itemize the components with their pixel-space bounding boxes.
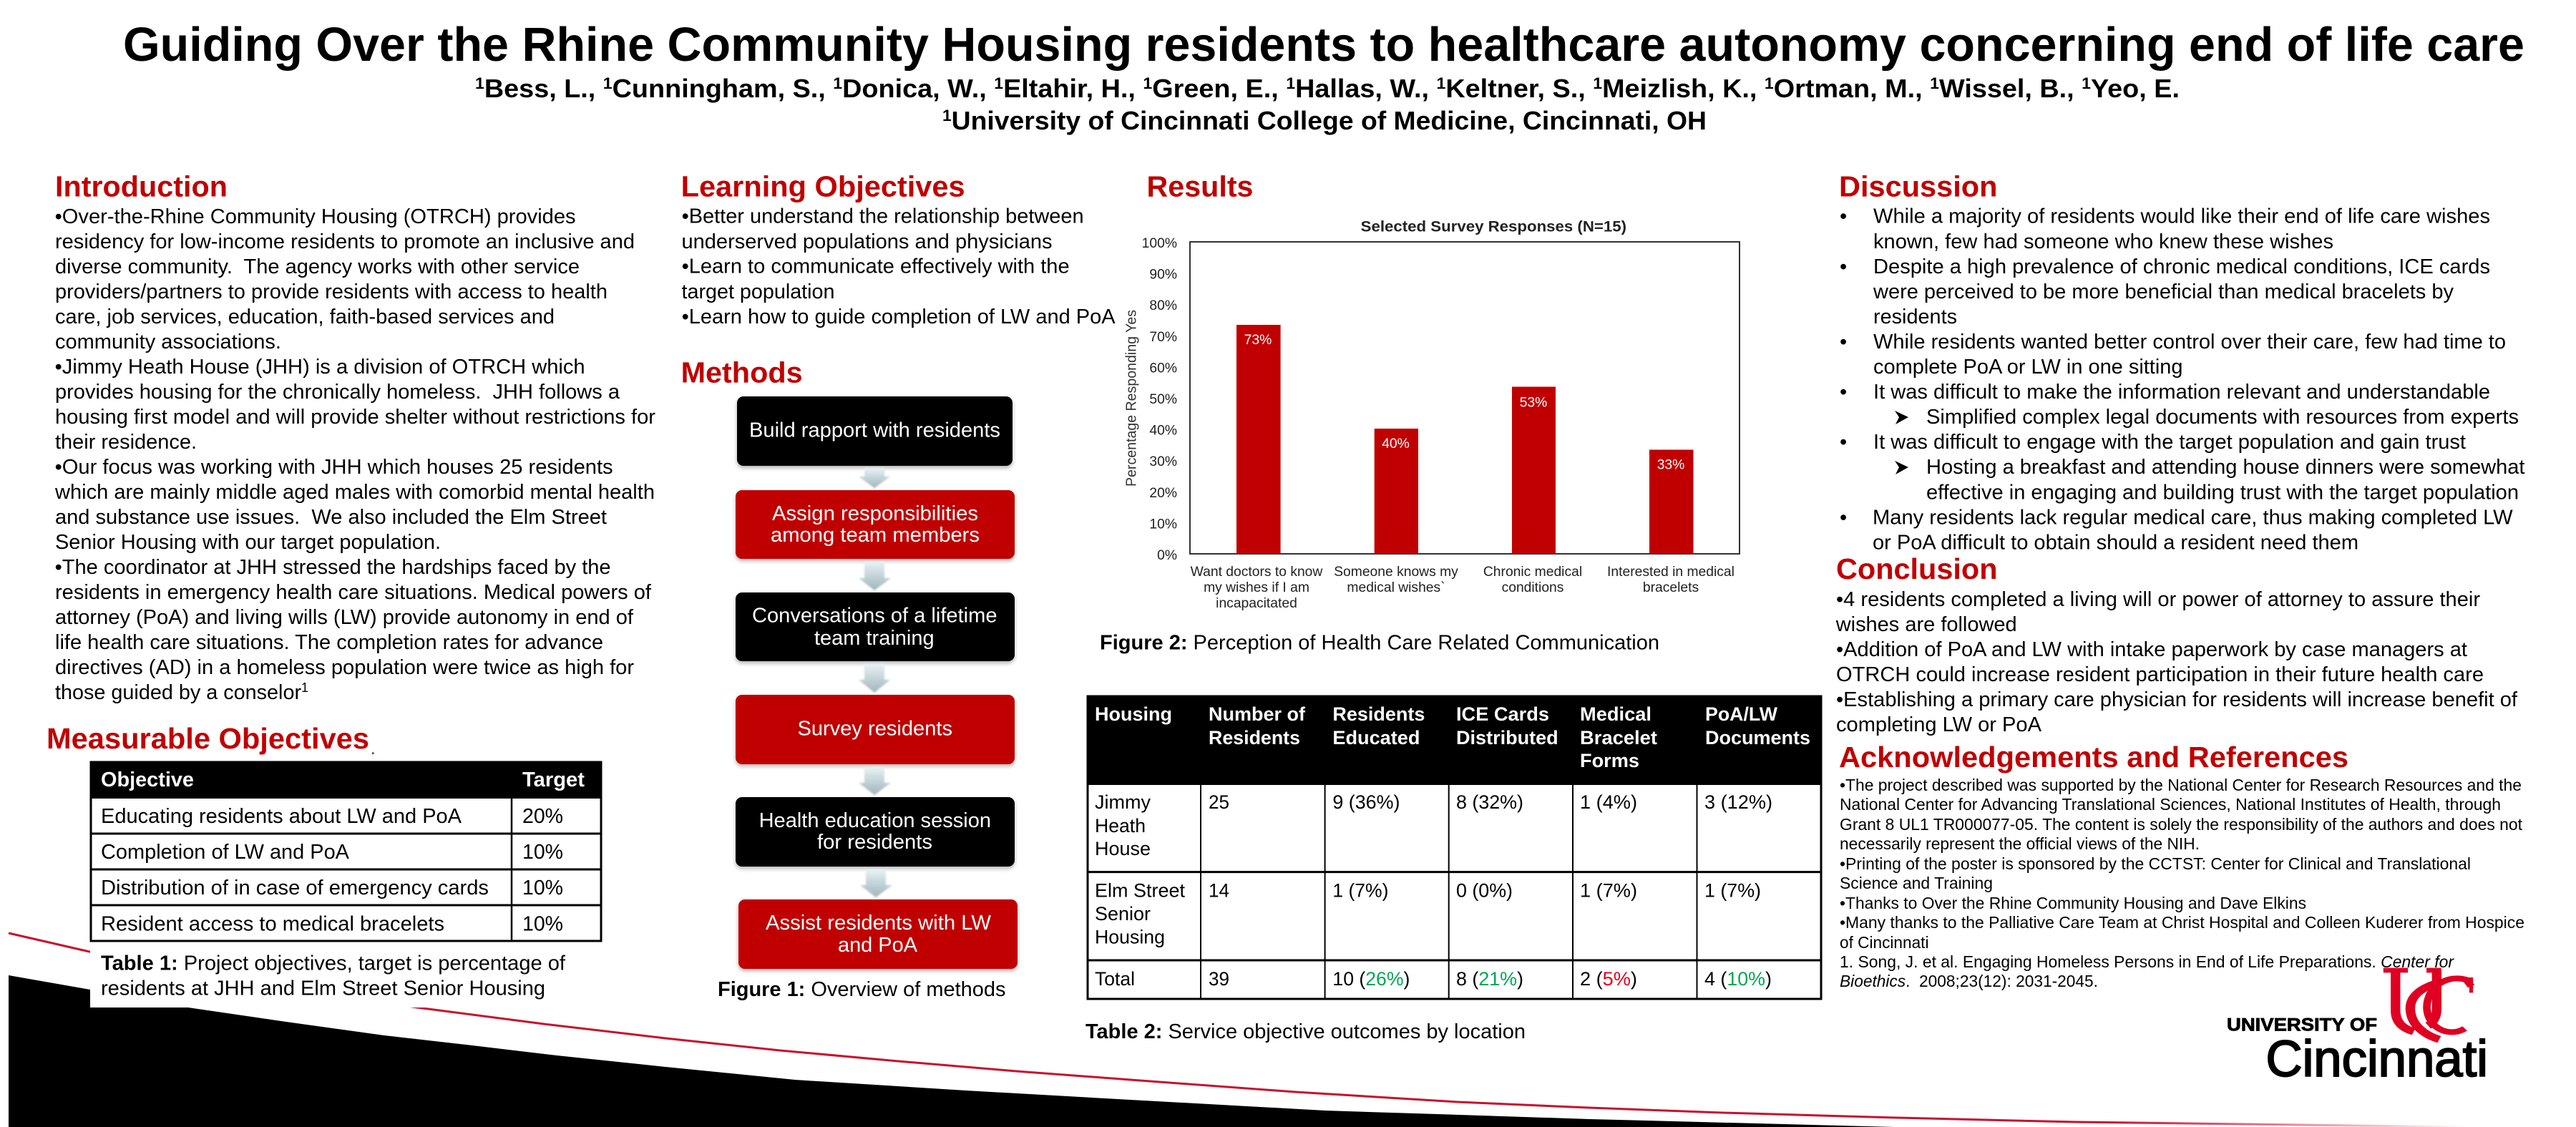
x axis labels: [1191, 565, 1735, 611]
x axis labels: my wishes if I am: [1204, 580, 1309, 595]
learning objectives list: target population: [681, 280, 834, 303]
table 2 row: Jimmy Heath House: House: [1095, 838, 1151, 859]
table 2 row: Elm Street Senior Housing: 0 (0%): [1456, 880, 1513, 902]
table 2 row: Jimmy Heath House: Jimmy: [1095, 791, 1151, 813]
table 1: Target: [522, 769, 585, 791]
white backing behind caption: [90, 761, 602, 1008]
flow step 5: for residents: [817, 831, 932, 854]
arrow 2: [859, 562, 891, 590]
table 1: Completion of LW and PoA: [101, 841, 350, 864]
discussion bullet list: •: [1840, 331, 1847, 353]
conclusion list: [1835, 588, 2518, 736]
table 1: 20%: [522, 805, 563, 828]
learning objectives list: •Learn to communicate effectively with the: [682, 255, 1070, 278]
discussion bullet list: Many residents lack regular medical care, thus making completed LW: [1873, 507, 2513, 530]
logo text: UNIVERSITY OF: UNIVERSITY OF: [2227, 1015, 2377, 1035]
heading: methods: Methods: [681, 356, 803, 389]
table 2 row: Jimmy Heath House: 8 (32%): [1456, 791, 1523, 813]
flow step 2: [736, 490, 1015, 559]
discussion bullet list: •: [1840, 507, 1847, 530]
y axis labels: 100%: [1142, 236, 1177, 251]
acknowledgements text: •Thanks to Over the Rhine Community Housing and Dave Elkins: [1840, 894, 2306, 912]
introduction body text: those guided by a conselor: [55, 681, 303, 704]
authors: Eltahir, H.,: [1003, 74, 1143, 103]
acknowledgements text: •The project described was supported by the National Center for Research Resources and the: [1840, 776, 2522, 794]
table 2 row: total: [1095, 968, 1772, 990]
table 2 row: Elm Street Senior Housing: 1 (7%): [1704, 880, 1761, 902]
discussion bullet list: effective in engaging and building trust with the target population: [1926, 481, 2519, 504]
y axis labels: 90%: [1149, 268, 1177, 283]
bar: chronic conditions 53%: [1512, 386, 1556, 554]
title: Guiding Over the Rhine Community Housing residents to healthcare autonomy concerning end of life care: [123, 19, 2524, 72]
bar: someone knows 40%: 40%: [1382, 436, 1410, 452]
authors: Ortman, M.,: [1774, 74, 1930, 103]
affiliation: University of Cincinnati College of Medicine, Cincinnati, OH: [952, 106, 1707, 135]
table 1 caption: [101, 952, 566, 1000]
conclusion list: completing LW or PoA: [1836, 713, 2042, 736]
panel: acknowledgements and references: [1839, 741, 2524, 990]
flow step 6: [738, 899, 1018, 969]
conclusion list: wishes are followed: [1835, 613, 2017, 636]
figure 2 caption: Figure 2: Perception of Health Care Related Communication: [1100, 631, 1659, 654]
authors: 1: [2082, 74, 2091, 92]
table 2 header row: Documents: [1705, 727, 1810, 748]
arrow 3: [859, 664, 890, 693]
bar: want doctors to know 73%: [1236, 325, 1281, 554]
table 2 row: Jimmy Heath House: 1 (4%): [1580, 791, 1637, 813]
acknowledgements text: 1. Song, J. et al. Engaging Homeless Persons in End of Life Preparations. Center for: [1840, 952, 2454, 971]
introduction body text: •Jimmy Heath House (JHH) is a division of OTRCH which: [55, 356, 585, 379]
arrow 1: [859, 468, 890, 488]
flow step 5: [736, 797, 1015, 867]
authors: Yeo, E.: [2091, 74, 2180, 103]
discussion bullet list: It was difficult to make the information relevant and understandable: [1873, 381, 2490, 404]
y axis labels: 30%: [1149, 454, 1177, 469]
table 2 row: Elm Street Senior Housing: [1095, 880, 1761, 948]
table 2 row: total: 2 (5%): [1580, 968, 1637, 990]
discussion bullet list: •: [1840, 381, 1847, 404]
authors: 1: [475, 74, 484, 92]
decorative swoosh: black band: [9, 975, 1895, 1127]
table 1: [90, 761, 602, 941]
icon: UC monogram: [2384, 968, 2472, 1040]
learning objectives list: •Learn how to guide completion of LW and PoA: [682, 306, 1116, 328]
introduction body text: 1: [301, 680, 308, 695]
flow step 3: team training: [814, 627, 935, 650]
acknowledgements text: necessarily represent the official views of the NIH.: [1840, 834, 2200, 853]
table 2 caption: Table 2: Service objective outcomes by location: [1085, 1020, 1526, 1043]
acknowledgements text: [1840, 776, 2524, 990]
acknowledgements text: Grant 8 UL1 TR000077-05. The content is solely the responsibility of the authors and does not: [1840, 815, 2523, 834]
table 1 caption: Table 1: Project objectives, target is percentage of: [101, 952, 566, 975]
discussion bullet list: Simplified complex legal documents with resources from experts: [1926, 406, 2519, 429]
flow step 2: among team members: [771, 524, 980, 547]
heading: discussion: Discussion: [1839, 170, 1998, 203]
authors: 1: [603, 74, 613, 92]
acknowledgements text: of Cincinnati: [1840, 933, 1929, 952]
discussion bullet list: •: [1840, 205, 1847, 228]
discussion bullet list: residents: [1873, 306, 1957, 328]
authors: Keltner, S.,: [1445, 74, 1593, 103]
y axis labels: 0%: [1157, 548, 1177, 563]
introduction body text: [54, 205, 655, 704]
flow step 5: Health education session: [759, 809, 991, 832]
panel: introduction: [54, 170, 655, 704]
introduction body text: residents in emergency health care situations. Medical powers of: [55, 581, 652, 604]
discussion bullet list: [1840, 205, 2524, 555]
introduction body text: which are mainly middle aged males with comorbid mental health: [54, 481, 655, 504]
flow step 1: [737, 396, 1013, 466]
flow step 6: Assist residents with LW: [766, 912, 992, 935]
introduction body text: •The coordinator at JHH stressed the hardships faced by the: [55, 556, 611, 579]
acknowledgements text: National Center for Advancing Translational Sciences, National Institutes of Health, through: [1840, 795, 2501, 814]
table 2 row: Elm Street Senior Housing: 14: [1209, 880, 1229, 902]
panel: measurable objectives: [47, 722, 602, 1008]
discussion bullet list: •: [1840, 255, 1847, 278]
table 2 header row: Residents: [1209, 727, 1300, 748]
table 1: Distribution of in case of emergency cards: [101, 877, 489, 899]
table 2 header row: Number of: [1209, 703, 1306, 725]
discussion bullet list: While residents wanted better control over their care, few had time to: [1873, 331, 2506, 353]
authors: 1: [994, 74, 1003, 92]
y axis title: Percentage Responding Yes: [1123, 310, 1139, 487]
table 2 header row: Distributed: [1456, 727, 1558, 748]
x axis labels: conditions: [1502, 580, 1563, 595]
acknowledgements text: Science and Training: [1840, 874, 1993, 892]
table 2 row: total: 4 (10%): [1704, 968, 1772, 990]
introduction body text: life health care situations. The completion rates for advance: [55, 631, 603, 654]
acknowledgements text: Bioethics. 2008;23(12): 2031-2045.: [1840, 972, 2098, 990]
table 2 header row: Residents: [1332, 703, 1425, 725]
discussion bullet list: Hosting a breakfast and attending house dinners were somewhat: [1926, 456, 2524, 479]
learning objectives list: •Better understand the relationship between: [682, 205, 1084, 228]
panel: discussion: [1839, 170, 2524, 555]
arrow 4: [859, 767, 891, 795]
table 2 header row: ICE Cards: [1456, 703, 1549, 725]
y axis labels: [1142, 236, 1177, 563]
table 2 row: total: 10 (26%): [1332, 968, 1410, 990]
table 2 row: total: 8 (21%): [1456, 968, 1523, 990]
table 2 header row: Bracelet: [1580, 727, 1657, 748]
table 1: Educating residents about LW and PoA: [101, 805, 462, 828]
bar: medical bracelets 33%: [1649, 449, 1693, 554]
bar chart: selected survey responses: [1123, 219, 1740, 611]
bar: want doctors to know 73%: 73%: [1244, 333, 1272, 348]
table 2 header row: Forms: [1580, 750, 1639, 771]
discussion bullet list: complete PoA or LW in one sitting: [1873, 356, 2182, 379]
y axis labels: 70%: [1149, 330, 1177, 345]
introduction body text: •Our focus was working with JHH which houses 25 residents: [55, 456, 613, 479]
panel: methods: [681, 356, 1018, 1001]
introduction body text: directives (AD) in a homeless population were twice as high for: [55, 656, 634, 679]
authors: 1: [1930, 74, 1939, 92]
bar: someone knows 40%: [1375, 429, 1418, 554]
authors: 1: [833, 74, 842, 92]
table 2 row: total: 39: [1209, 968, 1229, 990]
y axis labels: 40%: [1149, 424, 1177, 439]
introduction body text: Senior Housing with our target population.: [55, 531, 441, 554]
table 1: 10%: [522, 841, 563, 864]
discussion bullet list: While a majority of residents would like their end of life care wishes: [1873, 205, 2490, 228]
learning objectives list: [681, 205, 1116, 328]
acknowledgements text: •Printing of the poster is sponsored by the CCTST: Center for Clinical and Translational: [1840, 854, 2471, 873]
heading: learning objectives: Learning Objectives: [681, 170, 965, 203]
authors: 1: [1437, 74, 1445, 92]
table 1: Objective: [101, 769, 194, 791]
introduction body text: and substance use issues. We also included the Elm Street: [55, 506, 607, 529]
introduction body text: housing first model and will provide shelter without restrictions for: [55, 406, 655, 429]
flow step 3: [736, 592, 1015, 661]
authors: Meizlish, K.,: [1602, 74, 1765, 103]
panel: results: [1085, 170, 1822, 1043]
table 2 row: Jimmy Heath House: 25: [1209, 791, 1229, 813]
figure 1 caption: Figure 1: Overview of methods: [718, 978, 1006, 1001]
table 2 row: Elm Street Senior Housing: Housing: [1095, 927, 1165, 948]
bar: chronic conditions 53%: 53%: [1520, 396, 1547, 411]
table 2 row: total: Total: [1095, 968, 1135, 990]
logo: University of Cincinnati: [2227, 968, 2488, 1088]
panel: measurable objectives: ¸: [371, 743, 375, 755]
authors: Green, E.,: [1152, 74, 1286, 103]
introduction body text: community associations.: [55, 331, 281, 353]
table 1: 10%: [522, 913, 563, 936]
introduction body text: their residence.: [55, 431, 197, 454]
x axis labels: Interested in medical: [1607, 565, 1735, 580]
table 2 row: Jimmy Heath House: 9 (36%): [1332, 791, 1400, 813]
conclusion list: •Addition of PoA and LW with intake paperwork by case managers at: [1836, 638, 2467, 661]
discussion bullet list: Despite a high prevalence of chronic medical conditions, ICE cards: [1873, 255, 2490, 278]
affiliation: 1: [942, 107, 952, 125]
x axis labels: medical wishes`: [1347, 580, 1445, 595]
plot frame: [1190, 242, 1740, 554]
flow step 3: Conversations of a lifetime: [752, 605, 997, 628]
panel: conclusion: [1835, 552, 2518, 736]
logo text: Cincinnati: Cincinnati: [2265, 1031, 2488, 1088]
authors: 1: [1143, 74, 1152, 92]
authors: Bess, L.,: [484, 74, 603, 103]
table 1: 10%: [522, 877, 563, 899]
authors: 1: [1593, 74, 1602, 92]
conclusion list: •Establishing a primary care physician for residents will increase benefit of: [1836, 688, 2518, 711]
discussion bullet list: known, few had someone who knew these wishes: [1873, 230, 2333, 253]
table 2 header row: PoA/LW: [1705, 703, 1777, 725]
table 2 header row: Medical: [1580, 703, 1652, 725]
table 2 row: Jimmy Heath House: 3 (12%): [1704, 791, 1772, 813]
panel: learning objectives: [681, 170, 1116, 328]
authors: 1: [1765, 74, 1774, 92]
x axis labels: incapacitated: [1216, 596, 1297, 611]
introduction body text: providers/partners to provide residents with access to health: [55, 280, 608, 303]
table 2: [1087, 696, 1822, 999]
x axis labels: Want doctors to know: [1191, 565, 1322, 580]
authors: 1: [1286, 74, 1295, 92]
y axis labels: 80%: [1149, 298, 1177, 313]
introduction body text: •Over-the-Rhine Community Housing (OTRCH) provides: [55, 205, 576, 228]
table 2 row: Jimmy Heath House: [1095, 791, 1772, 859]
heading: measurable objectives: Measurable Objectives: [47, 722, 369, 755]
heading: conclusion: Conclusion: [1836, 552, 1998, 585]
flow step 6: and PoA: [838, 934, 918, 957]
y axis labels: 20%: [1149, 486, 1177, 501]
x axis labels: Chronic medical: [1483, 565, 1582, 580]
discussion bullet list: It was difficult to engage with the target population and gain trust: [1873, 431, 2466, 454]
discussion bullet list: or PoA difficult to obtain should a resident need them: [1873, 532, 2358, 555]
introduction body text: diverse community. The agency works with other service: [55, 255, 580, 278]
discussion bullet list: were perceived to be more beneficial than medical bracelets by: [1873, 280, 2454, 303]
table 2 row: Jimmy Heath House: Heath: [1095, 815, 1146, 836]
heading: introduction: Introduction: [55, 170, 228, 203]
arrow 5: [860, 869, 892, 897]
table 1: Resident access to medical bracelets: [101, 913, 444, 936]
introduction body text: care, job services, education, faith-based services and: [55, 306, 555, 328]
table 2 row: Elm Street Senior Housing: 1 (7%): [1332, 880, 1388, 902]
x axis labels: bracelets: [1643, 580, 1699, 595]
acknowledgements text: •Many thanks to the Palliative Care Team at Christ Hospital and Colleen Kuderer from Hospice: [1840, 913, 2524, 932]
table 2 header row: Housing: [1095, 703, 1172, 725]
discussion bullet list: •: [1840, 431, 1847, 454]
decorative swoosh: red line: [9, 933, 2469, 1127]
y axis labels: 10%: [1149, 517, 1177, 532]
heading: acknowledgements and references: Acknowledgements and References: [1839, 741, 2348, 774]
conclusion list: OTRCH could increase resident participation in their future health care: [1836, 663, 2484, 686]
authors: Donica, W.,: [842, 74, 994, 103]
table 2 header row: [1095, 703, 1810, 771]
flow step 4: Survey residents: [797, 717, 952, 740]
x axis labels: Someone knows my: [1334, 565, 1458, 580]
table 1 caption: residents at JHH and Elm Street Senior Housing: [101, 977, 545, 1000]
chart title: Selected Survey Responses (N=15): [1361, 219, 1626, 235]
y axis labels: 50%: [1149, 392, 1177, 407]
authors: Cunningham, S.,: [613, 74, 833, 103]
table 2 row: Elm Street Senior Housing: 1 (7%): [1580, 880, 1637, 902]
flow step 4: [736, 695, 1015, 764]
table 2 row: Elm Street Senior Housing: Elm Street: [1095, 880, 1185, 902]
learning objectives list: underserved populations and physicians: [681, 230, 1052, 253]
conclusion list: •4 residents completed a living will or power of attorney to assure their: [1836, 588, 2480, 611]
heading: results: Results: [1146, 170, 1254, 203]
flow step 1: Build rapport with residents: [749, 419, 1000, 442]
authors: Wissel, B.,: [1939, 74, 2082, 103]
bar: medical bracelets 33%: 33%: [1657, 458, 1684, 473]
introduction body text: provides housing for the chronically homeless. JHH follows a: [55, 381, 620, 404]
flow step 2: Assign responsibilities: [772, 502, 978, 525]
introduction body text: residency for low-income residents to promote an inclusive and: [55, 230, 635, 253]
y axis labels: 60%: [1149, 361, 1177, 376]
table 2 row: Elm Street Senior Housing: Senior: [1095, 903, 1151, 924]
table 2 header row: Educated: [1332, 727, 1420, 748]
authors: Hallas, W.,: [1295, 74, 1437, 103]
introduction body text: attorney (PoA) and living wills (LW) provide autonomy in end of: [55, 606, 634, 629]
